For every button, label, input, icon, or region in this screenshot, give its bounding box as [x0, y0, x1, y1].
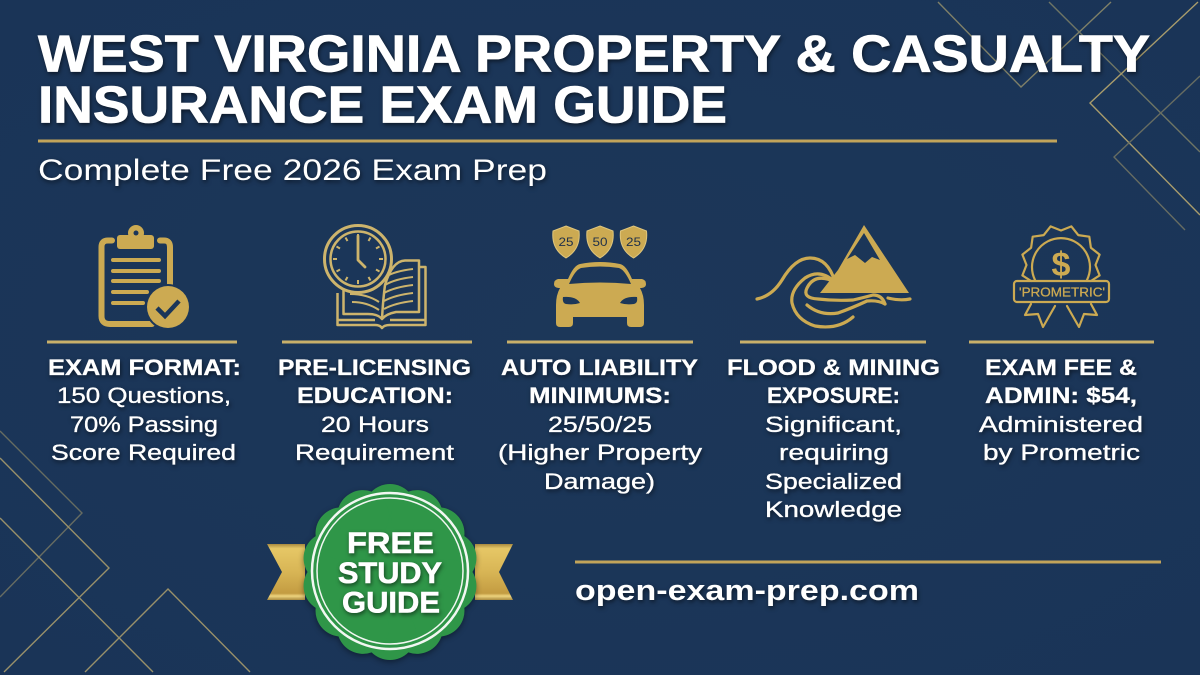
icon: car with shields: 50 — [592, 235, 608, 249]
seal — [298, 481, 482, 663]
icon: prometric seal: $ — [1052, 246, 1071, 284]
text: pre-licensing: EDUCATION: — [297, 383, 453, 408]
text: pre-licensing: 20 Hours — [321, 412, 429, 437]
text: exam fee — [979, 355, 1143, 465]
text: exam format: 70% Passing — [70, 412, 218, 437]
text: exam format — [48, 355, 241, 465]
icon: car with shields: 25 — [558, 235, 574, 249]
icon: car with shields: 25 — [626, 235, 641, 249]
panel: flood and mining — [727, 225, 940, 522]
icon: prometric seal: 'PROMETRIC' — [1019, 284, 1105, 300]
text: auto liability: Damage) — [544, 469, 655, 494]
divider — [969, 340, 1154, 344]
ribbon — [267, 544, 513, 600]
subtitle: Complete Free 2026 Exam Prep — [38, 154, 547, 187]
icon: wave and mountain — [757, 225, 910, 327]
text: flood and mining: requiring — [779, 440, 889, 465]
icon: car with shields — [553, 226, 647, 327]
icon: prometric seal — [1014, 226, 1109, 327]
title: INSURANCE EXAM GUIDE — [38, 76, 727, 134]
title: WEST VIRGINIA PROPERTY & CASUALTY — [38, 26, 1150, 84]
panel: auto liability — [498, 226, 702, 494]
badge text: FREE — [347, 527, 434, 560]
badge text: GUIDE — [342, 586, 440, 620]
badge text — [338, 527, 442, 620]
title — [38, 26, 1150, 134]
website url: open-exam-prep.com — [575, 575, 919, 607]
panel: pre-licensing education — [278, 226, 472, 465]
text: auto liability: (Higher Property — [498, 440, 702, 465]
panel: exam fee — [969, 226, 1154, 465]
text: flood and mining: Significant, — [765, 412, 902, 437]
divider — [47, 340, 237, 344]
badge text: STUDY — [338, 557, 442, 590]
footer divider — [575, 560, 1161, 564]
text: auto liability: MINIMUMS: — [529, 383, 671, 408]
text: exam format: Score Required — [51, 440, 236, 465]
text: pre-licensing — [278, 355, 471, 465]
text: pre-licensing: PRE-LICENSING — [278, 355, 471, 380]
icon: clock and book — [324, 226, 426, 328]
title divider — [38, 140, 1057, 142]
text: flood and mining: EXPOSURE: — [767, 383, 900, 408]
text: auto liability: AUTO LIABILITY — [501, 355, 698, 380]
badge: free study guide — [267, 481, 513, 663]
text: flood and mining: Knowledge — [765, 497, 902, 522]
text: pre-licensing: Requirement — [295, 440, 454, 465]
text: exam fee: by Prometric — [983, 440, 1140, 465]
text: flood and mining: FLOOD & MINING — [727, 355, 940, 380]
divider — [282, 340, 472, 344]
panel: exam format — [47, 225, 241, 465]
text: exam format: EXAM FORMAT: — [48, 355, 241, 380]
text: exam fee: Administered — [979, 412, 1143, 437]
icon: clipboard with check — [102, 225, 191, 330]
text: exam fee: EXAM FEE & — [985, 355, 1137, 380]
text: auto liability — [498, 355, 702, 494]
divider — [740, 340, 926, 344]
text: auto liability: 25/50/25 — [548, 412, 652, 437]
text: flood and mining: Specialized — [765, 469, 902, 494]
text: exam format: 150 Questions, — [57, 383, 231, 408]
divider — [507, 340, 693, 344]
text: exam fee: ADMIN: $54, — [985, 383, 1137, 408]
text: flood and mining — [727, 355, 940, 522]
